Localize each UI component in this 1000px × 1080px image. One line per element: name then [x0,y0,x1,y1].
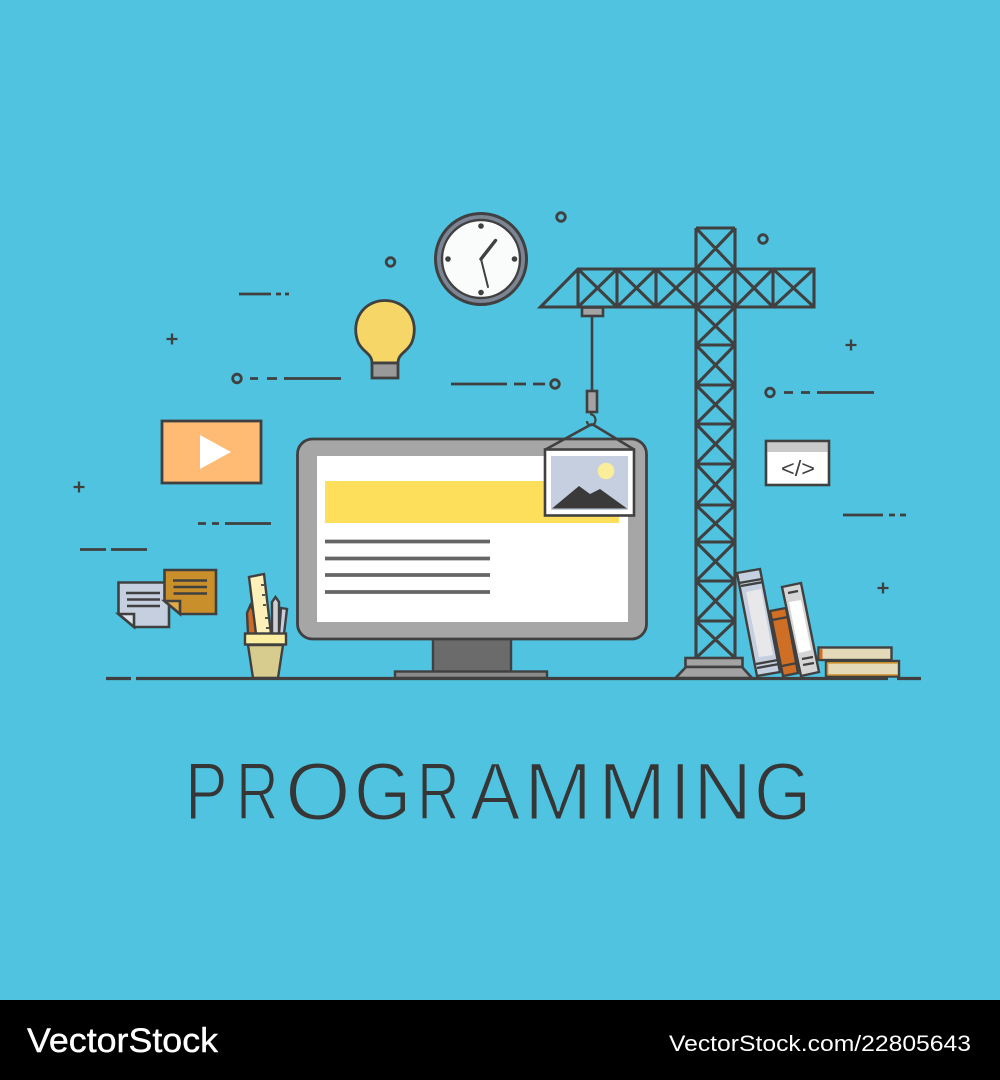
tower crane [540,228,814,678]
screen [317,456,628,622]
top flat book [818,648,892,660]
crane cable [591,316,593,391]
title: P [185,745,228,837]
crane jib [540,269,814,307]
cup body [248,645,283,678]
icon: grey sticky note [118,582,169,627]
blue pen [279,608,287,634]
monitor base [395,672,547,678]
hook block [587,391,597,412]
yellow header bar [325,481,619,523]
monitor stand [433,638,511,672]
picture mountains [552,486,627,508]
cup rim [245,634,286,644]
title: N [693,746,752,838]
monitor [298,439,646,678]
title: M [598,746,666,838]
icon: light bulb [356,300,414,378]
crane trolley [582,308,603,316]
watermark bar [0,1000,1000,1080]
monitor frame [298,439,646,639]
watermark logo: VectorStock [27,1022,219,1060]
bottom flat book [826,661,899,676]
hook [587,414,596,425]
icon: wall clock [436,214,526,304]
white book [782,583,819,676]
crane mast [696,228,735,658]
sling [546,424,634,450]
picture frame [545,450,634,516]
icon: orange sticky note [164,570,216,614]
hanging picture [545,424,634,516]
title [185,745,811,838]
text lines [325,542,490,592]
orange pencil [247,605,256,634]
ground line [106,677,921,680]
title: M [524,746,592,838]
title: R [417,746,460,838]
blue book [737,569,780,676]
orange book [770,608,798,676]
title: G [354,745,411,837]
floating dashes, plus signs and circles [74,213,906,593]
picture sky [551,456,628,510]
title: I [670,745,691,837]
watermark id: VectorStock.com/22805643 [669,1031,971,1056]
title: G [754,745,811,837]
icon: code window [766,441,829,485]
silver pencil [272,597,279,634]
books [737,569,899,676]
title: R [236,746,279,838]
title: O [285,746,351,837]
picture sun [598,463,614,479]
icon: code window: </> [781,456,815,481]
ruler [249,574,271,634]
icon: video player [162,421,261,483]
icon: pencil cup [245,574,287,678]
crane base [676,658,752,678]
title: A [470,746,521,837]
